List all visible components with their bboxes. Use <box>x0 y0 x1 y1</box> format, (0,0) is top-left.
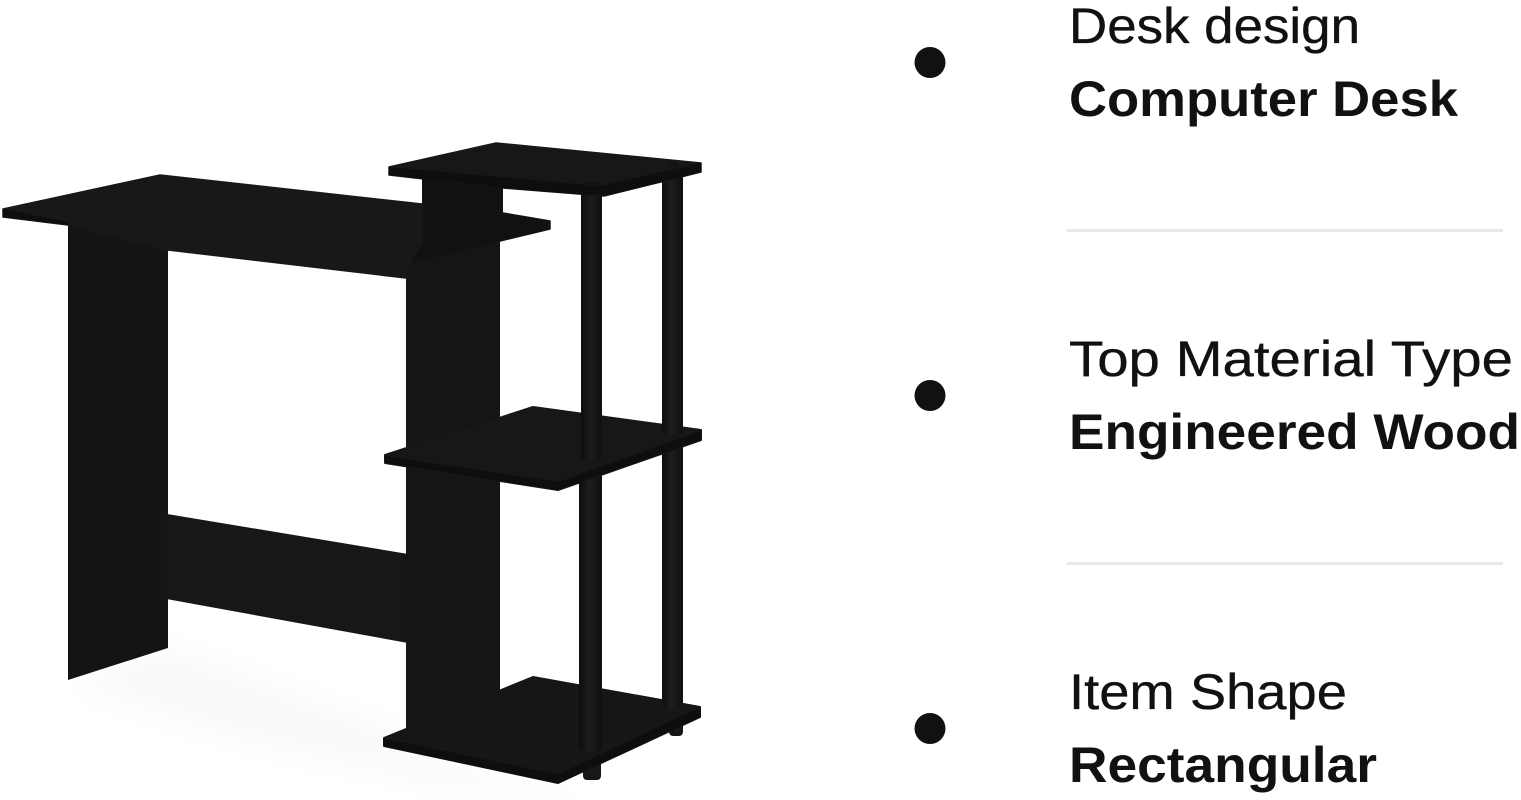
top shelf <box>389 143 701 196</box>
bottom shelf <box>384 677 700 783</box>
spec: item shape <box>914 664 1377 793</box>
product: computer desk with shelves <box>3 143 701 783</box>
spec: desk design <box>914 0 1458 127</box>
cross beam <box>161 513 408 643</box>
value: Rectangular <box>1069 737 1377 793</box>
right side panel <box>406 235 500 736</box>
value: Engineered Wood <box>1069 404 1520 460</box>
floor shadow <box>70 650 640 800</box>
bullet <box>914 47 946 78</box>
label: Top Material Type <box>1069 331 1513 387</box>
back pole lower over bottom shelf <box>662 600 683 709</box>
upper riser <box>422 175 503 250</box>
spec: top material type <box>914 331 1520 460</box>
left side panel <box>68 224 168 680</box>
label: Item Shape <box>1069 664 1347 720</box>
bullet <box>914 713 946 744</box>
middle shelf <box>385 405 701 490</box>
value: Computer Desk <box>1069 71 1458 127</box>
back pole lower <box>662 430 683 710</box>
front pole lower <box>579 465 602 752</box>
back pole upper <box>662 170 683 435</box>
front pole upper <box>581 190 602 461</box>
bullet <box>914 380 946 411</box>
desk top <box>3 175 550 278</box>
